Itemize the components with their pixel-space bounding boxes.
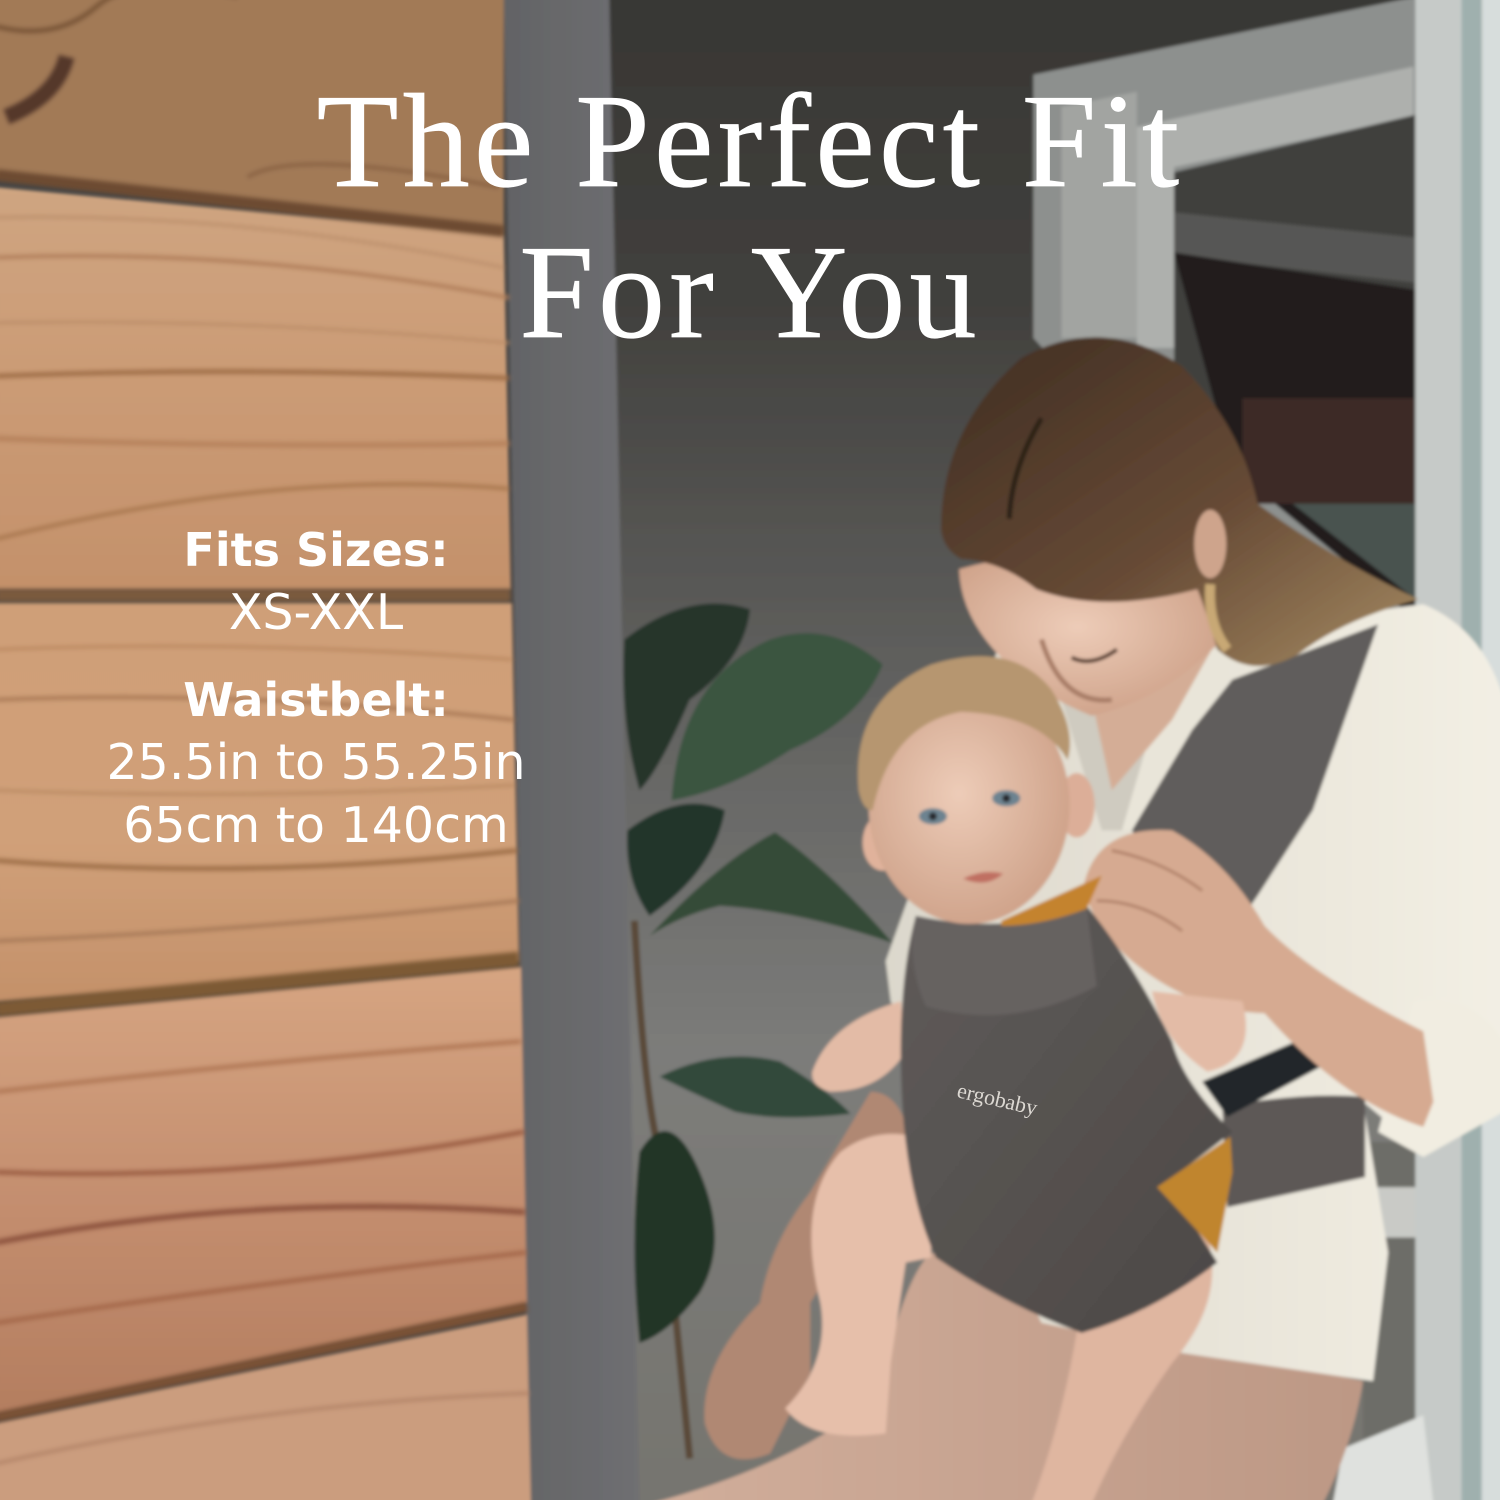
title: For You — [519, 218, 981, 366]
dark interior room — [599, 0, 1500, 1500]
woman: carrier strap and waistband — [1132, 624, 1378, 1207]
fits sizes value: XS-XXL — [229, 584, 403, 641]
waistbelt inches: 25.5in to 55.25in — [106, 734, 526, 791]
plant — [623, 604, 893, 1459]
title — [317, 67, 1183, 366]
waistbelt label: Waistbelt: — [183, 673, 449, 727]
baby: body, legs and arm — [785, 991, 1246, 1500]
window at right — [1033, 0, 1500, 1500]
woman: arm and hand — [704, 830, 1433, 1459]
fits sizes label: Fits Sizes: — [183, 523, 449, 577]
carrier logo: ergobaby — [955, 1078, 1040, 1120]
woman: trousers — [650, 1252, 1363, 1500]
size specifications text — [106, 523, 526, 854]
waistbelt centimetres: 65cm to 140cm — [123, 797, 509, 854]
baby: head — [858, 656, 1102, 926]
woman: white shirt body — [886, 604, 1500, 1381]
wood cladding planks — [0, 0, 531, 1500]
woman: head and hair — [941, 337, 1418, 790]
baby carrier panel — [901, 906, 1232, 1333]
grey door post — [504, 0, 639, 1500]
title: The Perfect Fit — [317, 67, 1183, 215]
